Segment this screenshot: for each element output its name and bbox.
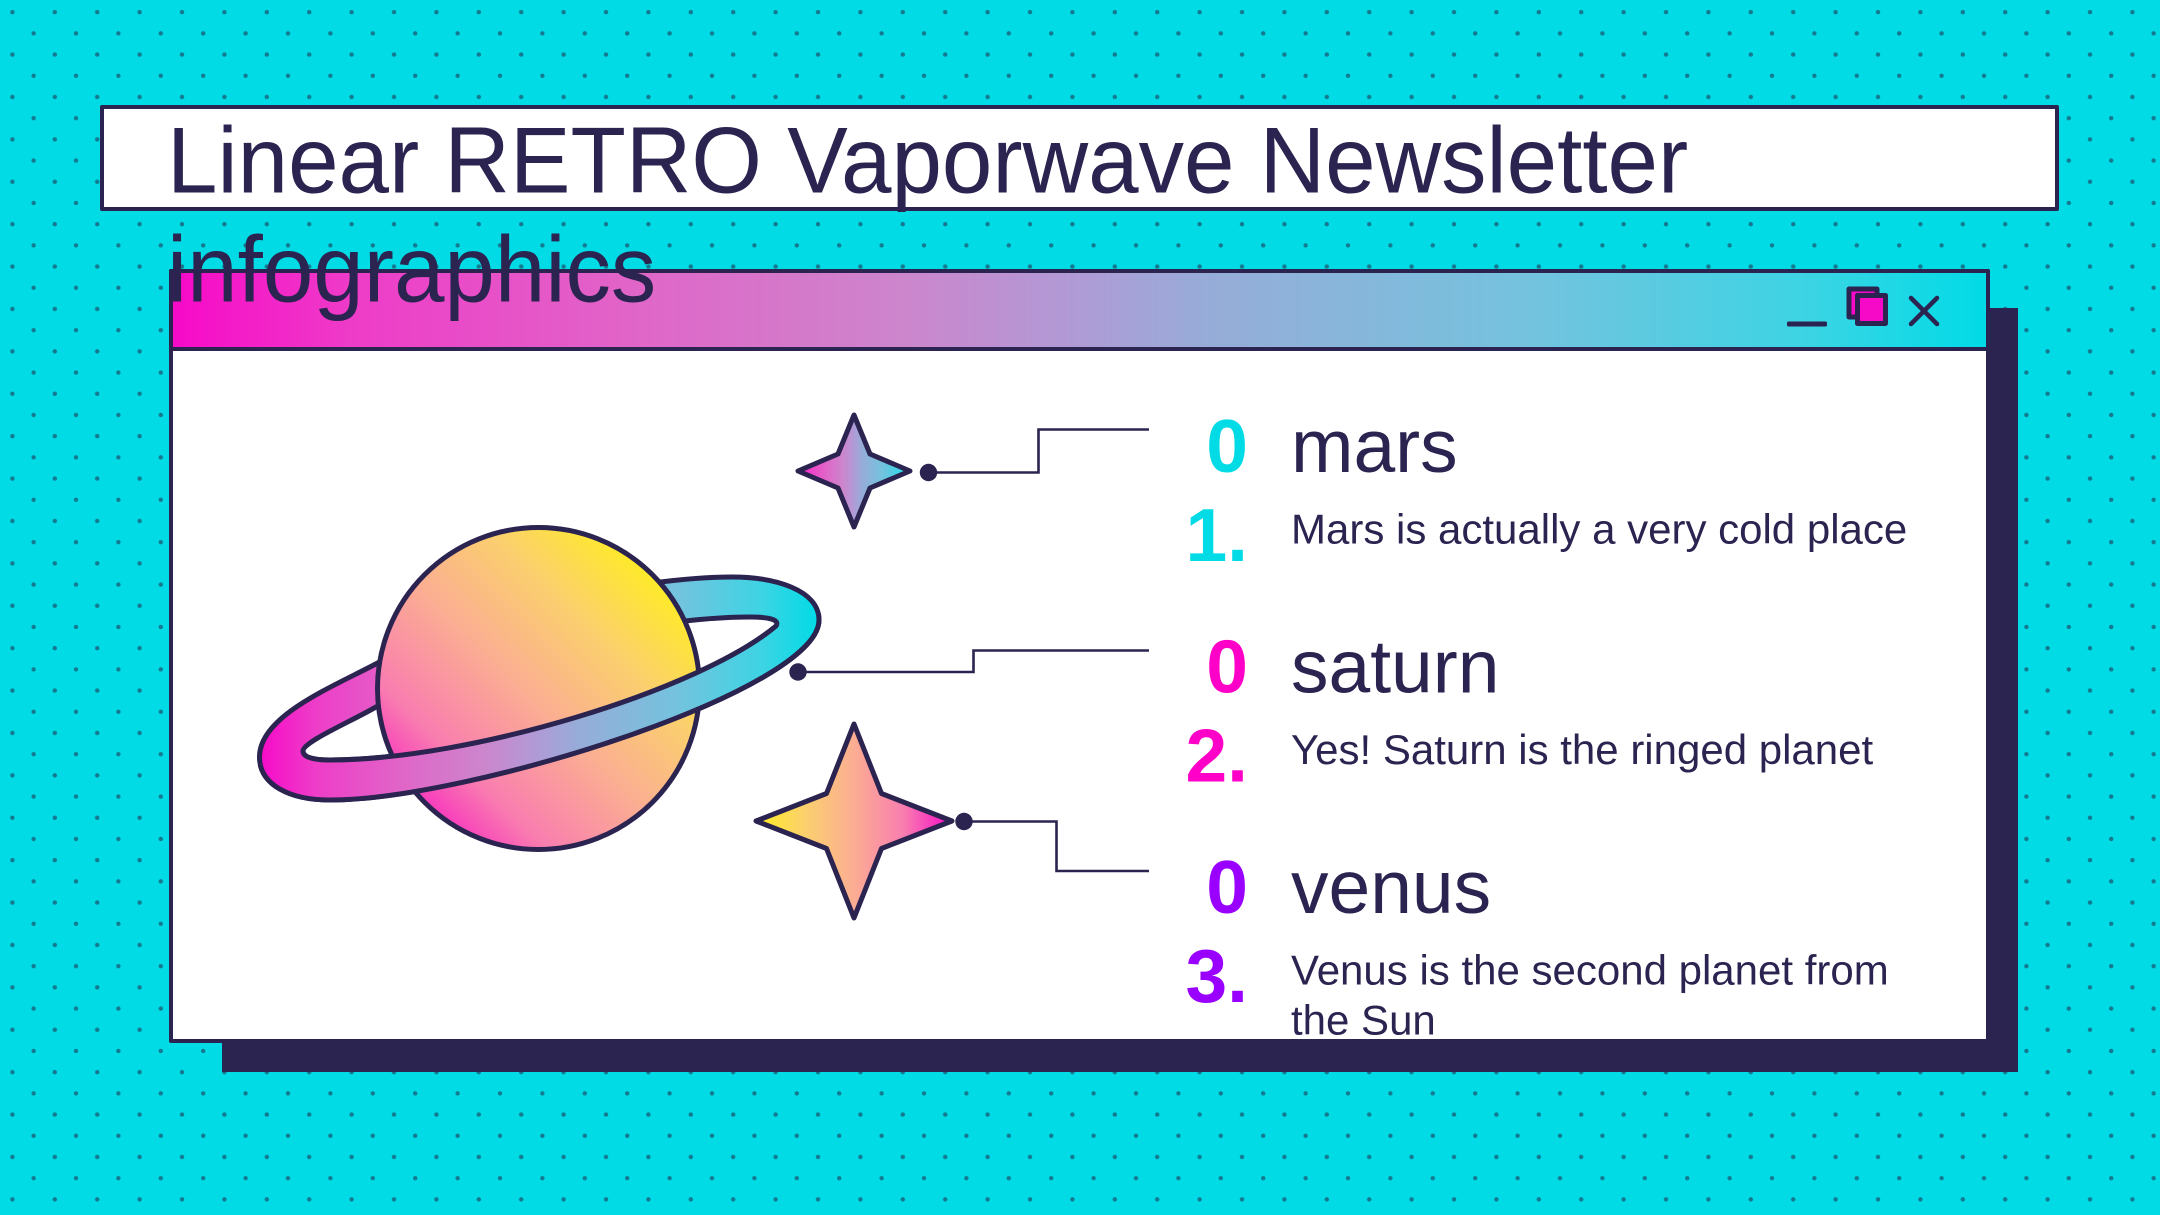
planet sphere (378, 528, 700, 850)
description: venus: Venus is the second planet from (1291, 947, 1889, 994)
number 02: 2. (1185, 714, 1248, 798)
window shadow (222, 308, 2018, 1072)
number 01: 1. (1185, 493, 1248, 577)
description: saturn: Yes! Saturn is the ringed planet (1291, 726, 1874, 773)
title: Linear RETRO Vaporwave Newsletter (167, 109, 1688, 213)
icon: close (1911, 298, 1937, 324)
heading: venus: venus (1291, 845, 1491, 929)
icon: small star (798, 415, 910, 527)
item: mars (1185, 404, 1907, 577)
connector: saturn (789, 650, 1149, 681)
number 02: 0 (1206, 624, 1248, 708)
window body (171, 271, 1988, 1041)
item: venus (1185, 845, 1889, 1044)
heading: mars: mars (1291, 404, 1458, 488)
planet ring back (260, 577, 819, 800)
icon: minimize (1787, 322, 1827, 326)
heading: saturn: saturn (1291, 624, 1499, 708)
description: venus: the Sun (1291, 997, 1436, 1044)
number 01: 0 (1206, 404, 1248, 488)
icon: large star (756, 724, 952, 918)
number 02 (1185, 624, 1248, 798)
number 03: 0 (1206, 845, 1248, 929)
title box (102, 107, 2057, 209)
connector: mars (920, 430, 1149, 481)
panel: retro window (171, 271, 1988, 1041)
number 01 (1185, 404, 1248, 577)
window title bar (171, 271, 1988, 349)
number 03 (1185, 845, 1248, 1018)
description: mars: Mars is actually a very cold place (1291, 506, 1907, 553)
number 03: 3. (1185, 934, 1248, 1018)
connector: venus (955, 813, 1149, 871)
title: infographics (167, 218, 656, 322)
icon: restore (1849, 289, 1886, 324)
illustration: ringed planet (260, 528, 819, 850)
planet ring front (258, 613, 822, 802)
item: saturn (1185, 624, 1874, 798)
